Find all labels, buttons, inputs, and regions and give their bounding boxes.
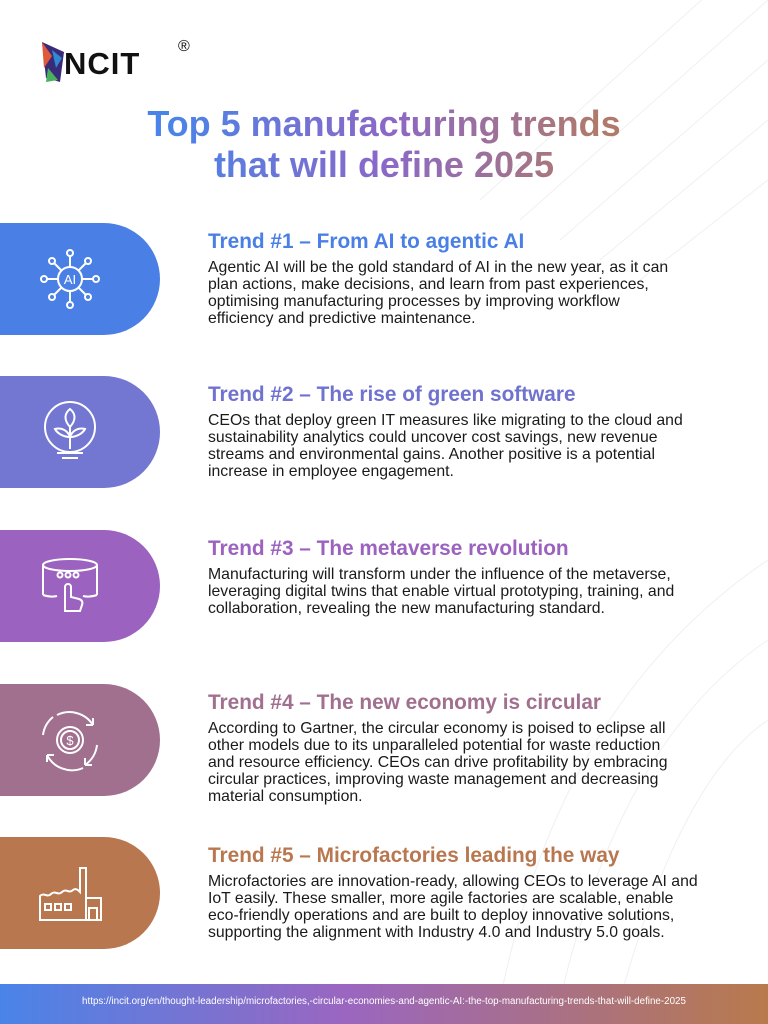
trend 3 text: Manufacturing will transform under the influence of the metaverse, — [208, 566, 671, 583]
trend 1 text: Agentic AI will be the gold standard of AI in the new year, as it can — [208, 259, 668, 276]
trend 1 text: plan actions, make decisions, and learn from past experiences, — [208, 276, 649, 293]
title — [0, 103, 768, 185]
trend 4 text — [208, 691, 668, 805]
pill 1: AI icon — [0, 223, 160, 335]
trend 2 text — [208, 383, 683, 480]
trend 5 text: Trend #5 – Microfactories leading the way — [208, 844, 619, 867]
pill 2: green bulb icon — [0, 376, 160, 488]
trend 4 text: Trend #4 – The new economy is circular — [208, 691, 601, 714]
trend 5 text — [208, 844, 698, 941]
logo — [42, 38, 190, 82]
title: that will define 2025 — [214, 144, 554, 185]
trend 5 text: supporting the alignment with Industry 4.0 and Industry 5.0 goals. — [208, 924, 665, 941]
trend 4 text: circular practices, improving waste management and decreasing — [208, 771, 658, 788]
trend 1 text: optimising manufacturing processes by improving workflow — [208, 293, 620, 310]
trend 2 text: CEOs that deploy green IT measures like migrating to the cloud and — [208, 412, 683, 429]
trend 2 text: Trend #2 – The rise of green software — [208, 383, 576, 406]
pill 1: AI icon: AI — [64, 272, 76, 287]
trend 5 text: eco-friendly operations and are built to deploy innovative solutions, — [208, 907, 674, 924]
trend 5 text: Microfactories are innovation-ready, allowing CEOs to leverage AI and — [208, 873, 698, 890]
footer: https://incit.org/en/thought-leadership/microfactories,-circular-economies-and-agentic-AI:-the-top-manufacturing-trends-that-will-define-2025 — [82, 996, 686, 1007]
trend 3 text: Trend #3 – The metaverse revolution — [208, 537, 569, 560]
trend 2 text: increase in employee engagement. — [208, 463, 454, 480]
trend 3 text: leveraging digital twins that enable virtual prototyping, training, and — [208, 583, 674, 600]
trend 1 text: efficiency and predictive maintenance. — [208, 310, 476, 327]
title: Top 5 manufacturing trends — [147, 103, 621, 144]
trend 1 text — [208, 230, 668, 327]
logo: NCIT — [64, 46, 140, 81]
trend 5 text: IoT easily. These smaller, more agile factories are scalable, enable — [208, 890, 673, 907]
pill 4: circular economy icon: $ — [66, 733, 74, 748]
trend 3 text: collaboration, revealing the new manufacturing standard. — [208, 600, 605, 617]
trend 4 text: and resource efficiency. CEOs can drive profitability by embracing — [208, 754, 668, 771]
trend 2 text: sustainability analytics could uncover cost savings, new revenue — [208, 429, 658, 446]
trend 3 text — [208, 537, 674, 617]
trend 4 text: other models due to its unparalleled potential for waste reduction — [208, 737, 660, 754]
pill 4: circular economy icon — [0, 684, 160, 796]
footer — [0, 984, 768, 1024]
pill 3: metaverse icon — [0, 530, 160, 642]
trend 2 text: streams and environmental gains. Another positive is a potential — [208, 446, 655, 463]
logo: ® — [178, 38, 190, 55]
trend 1 text: Trend #1 – From AI to agentic AI — [208, 230, 524, 253]
trend 4 text: According to Gartner, the circular economy is poised to eclipse all — [208, 720, 665, 737]
pill 5: factory icon — [0, 837, 160, 949]
trend 4 text: material consumption. — [208, 788, 363, 805]
